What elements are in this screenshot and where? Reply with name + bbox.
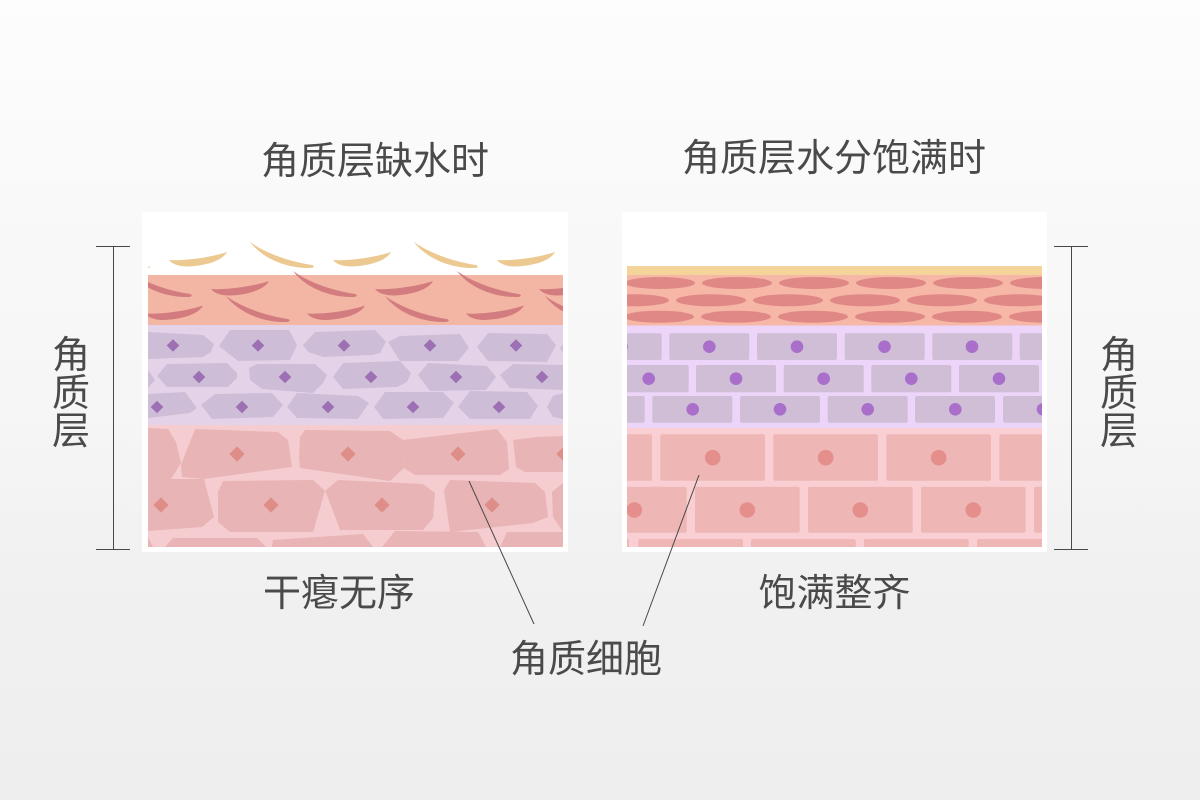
right bracket [1054,246,1088,550]
layer: ordered purple cells [627,326,1042,428]
right vertical label: 质 [1100,373,1138,415]
right vertical label: 角 [1100,335,1138,377]
leader line to dry cell [469,481,534,624]
left vertical label: 层 [52,411,90,453]
layer: disordered salmon cells [148,271,563,325]
layer: ordered salmon cells [627,275,1042,326]
title: dry stratum corneum: 角质层缺水时 [261,141,489,183]
panel: hydrated skin diagram [622,266,1047,552]
layer: yellow surface band [627,266,1042,275]
layer: irregular purple cells [148,325,563,425]
panel: dry skin diagram [142,242,568,552]
left vertical label: 角 [52,335,90,377]
right vertical label: 层 [1100,411,1138,453]
left vertical label: 质 [52,373,90,415]
layer: irregular pink cells [148,425,572,547]
caption: plump and orderly: 饱满整齐 [758,573,911,615]
title: hydrated stratum corneum: 角质层水分饱满时 [682,138,986,180]
callout: corneocytes: 角质细胞 [510,639,662,681]
caption: dry and disordered: 干瘪无序 [263,573,415,615]
right vertical label [1100,335,1138,453]
layer: flaking surface cells [148,242,555,268]
left vertical label [52,335,90,453]
layer: ordered pink cells [627,428,1042,547]
leader line to hydrated cell [643,475,699,626]
left bracket [96,246,130,550]
